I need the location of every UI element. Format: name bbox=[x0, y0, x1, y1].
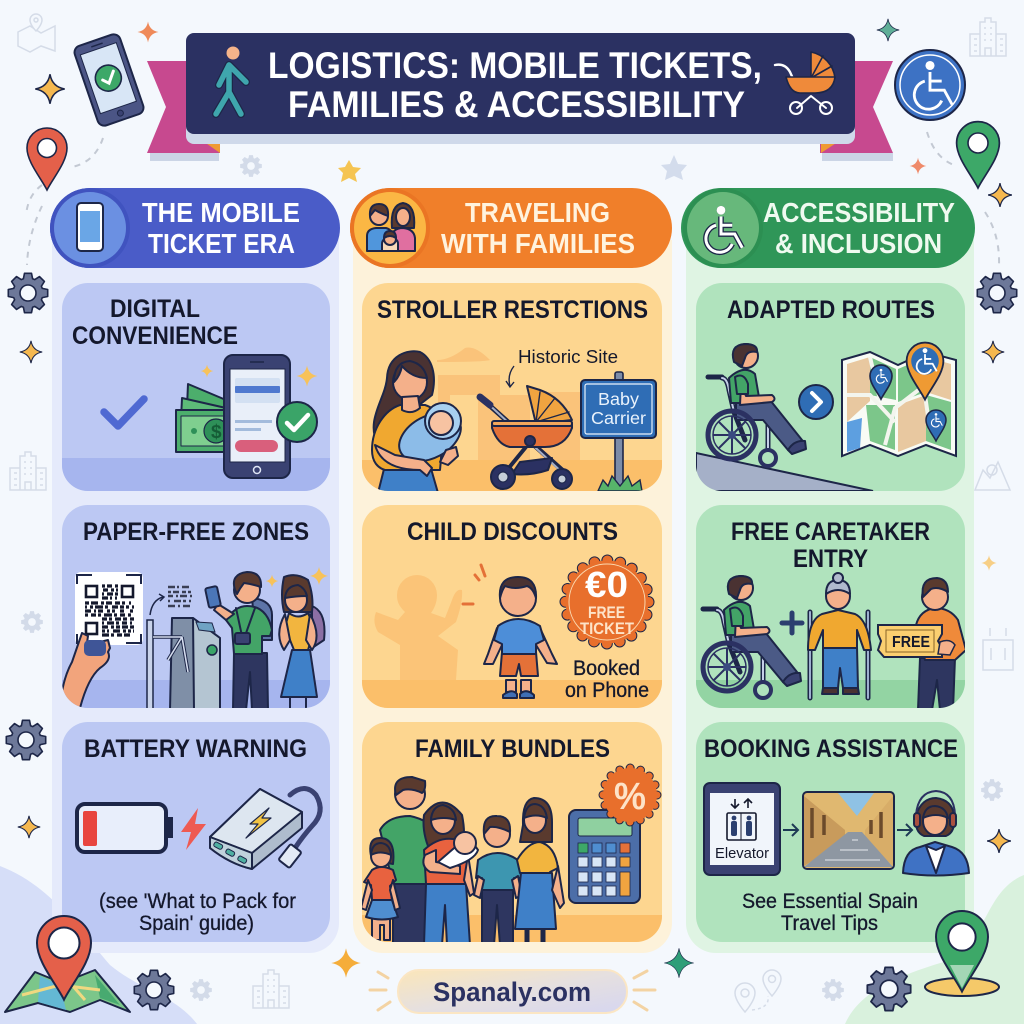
power bank with cable bbox=[210, 788, 320, 869]
folded map bbox=[5, 970, 130, 1012]
note: packing guide bbox=[99, 890, 296, 935]
panel: the mobile ticket era bbox=[50, 188, 340, 953]
discount badge bbox=[603, 768, 657, 822]
icon: sparkle right 2 bbox=[987, 829, 1011, 853]
icon: phone with check bbox=[73, 32, 145, 128]
baby carrier sign: Baby bbox=[598, 389, 639, 409]
heading: battery warning: BATTERY WARNING bbox=[84, 735, 307, 763]
arrow bbox=[897, 824, 912, 836]
baby carrier sign bbox=[581, 372, 656, 491]
note: booked on phone bbox=[565, 657, 649, 702]
icon: faint gear bbox=[240, 155, 262, 177]
icon: faint gear right bbox=[981, 779, 1003, 801]
card: free caretaker entry bbox=[696, 505, 966, 710]
dashed route right bbox=[927, 132, 999, 265]
icon: faint mountain map bbox=[975, 462, 1010, 490]
heading: digital convenience: DIGITAL bbox=[110, 295, 200, 323]
icon: orange sparkle bbox=[138, 22, 158, 42]
card: child discounts bbox=[362, 505, 662, 708]
header pill bbox=[50, 188, 340, 268]
icon: sparkle right 1 bbox=[982, 341, 1004, 363]
title banner bbox=[147, 33, 893, 161]
icon: wheelchair badge bbox=[895, 50, 965, 120]
low battery bbox=[77, 804, 173, 852]
card: paper-free zones bbox=[60, 505, 330, 710]
support agent bbox=[903, 791, 969, 876]
heading: free caretaker entry: FREE CARETAKER bbox=[731, 518, 930, 546]
son bbox=[474, 816, 522, 945]
header pill: TRAVELING bbox=[465, 197, 610, 228]
hand bbox=[60, 633, 110, 708]
wheelchair user bbox=[708, 344, 806, 466]
decorative icons: top right bbox=[877, 18, 1012, 265]
icon: faint gear right bbox=[822, 979, 844, 1001]
boy bbox=[463, 565, 557, 698]
icon: teal sparkle bbox=[877, 19, 899, 41]
sparkles bbox=[201, 365, 318, 386]
discount badge: % bbox=[614, 776, 646, 818]
column background bbox=[52, 240, 339, 953]
mother with baby bbox=[372, 351, 469, 493]
free ticket bbox=[878, 625, 955, 657]
rays around site pill bbox=[370, 971, 655, 1010]
icon: yellow sparkle bbox=[331, 948, 361, 978]
red pin bbox=[37, 916, 91, 1000]
heading: child discounts: CHILD DISCOUNTS bbox=[407, 518, 618, 546]
family group bbox=[361, 777, 564, 945]
left ribbon bbox=[147, 61, 220, 161]
icon: faint building bbox=[970, 18, 1006, 56]
icon: faint city bbox=[253, 970, 289, 1008]
title text: FAMILIES & ACCESSIBILITY bbox=[288, 84, 745, 125]
icon: red pin bbox=[27, 128, 67, 190]
icon: sparkle left 1 bbox=[20, 341, 42, 363]
icon: gear bottom left bbox=[134, 970, 174, 1010]
note: essential spain travel tips: See Essential Spain bbox=[742, 890, 918, 913]
calculator bbox=[569, 810, 640, 903]
panel: accessibility and inclusion bbox=[681, 188, 975, 953]
title text bbox=[268, 45, 762, 125]
plus sign bbox=[782, 613, 802, 633]
free ticket badge: €0 bbox=[585, 564, 628, 605]
icon: gear left 2 bbox=[6, 720, 46, 760]
card: digital convenience bbox=[62, 283, 330, 491]
adult silhouette bbox=[374, 575, 462, 680]
banknotes bbox=[176, 384, 228, 452]
website pill bbox=[398, 970, 627, 1013]
icon: sparkle left 2 bbox=[18, 816, 40, 838]
small QR with arrow bbox=[150, 587, 192, 615]
icon: faint elevator sign bbox=[983, 628, 1013, 670]
turnstile gate bbox=[147, 618, 220, 710]
daughter bbox=[361, 838, 400, 940]
QR code held in hand bbox=[75, 572, 143, 645]
bottom-left map and pin bbox=[5, 916, 130, 1012]
caretaker with ticket bbox=[916, 578, 966, 710]
bottom decorative icons bbox=[134, 948, 911, 1012]
heading: free caretaker entry bbox=[731, 518, 930, 573]
heading: free caretaker entry: ENTRY bbox=[793, 545, 868, 573]
free ticket badge: TICKET bbox=[580, 619, 635, 638]
icon: baby stroller bbox=[775, 52, 835, 114]
check mark bbox=[104, 399, 144, 426]
note: essential spain travel tips: Travel Tips bbox=[781, 912, 878, 935]
card: booking assistance bbox=[696, 722, 969, 942]
stroller bbox=[480, 386, 572, 489]
map pins bbox=[870, 343, 946, 441]
icon: coral sparkle bbox=[910, 158, 926, 174]
note: booked on phone: Booked bbox=[573, 657, 640, 680]
cobbled street scene bbox=[803, 792, 894, 869]
arrow bbox=[783, 824, 798, 836]
note: packing guide: (see 'What to Pack for bbox=[99, 890, 296, 913]
next arrow bbox=[799, 385, 833, 419]
icon: faint city left bbox=[10, 452, 46, 490]
heading: adapted routes: ADAPTED ROUTES bbox=[727, 296, 935, 324]
folded map bbox=[842, 352, 956, 456]
column background bbox=[686, 240, 974, 953]
note: packing guide: Spain' guide) bbox=[139, 912, 254, 935]
traveler woman bbox=[279, 575, 324, 710]
column background bbox=[353, 240, 672, 953]
heading: digital convenience: CONVENIENCE bbox=[72, 322, 238, 350]
heading: family bundles: FAMILY BUNDLES bbox=[415, 735, 610, 763]
icon: yellow star bbox=[338, 160, 361, 182]
dashed route bbox=[26, 138, 103, 265]
phone bbox=[224, 355, 290, 478]
website pill: Spanaly.com bbox=[433, 977, 591, 1007]
icon: faint map bbox=[18, 14, 55, 52]
heading: paper-free zones: PAPER-FREE ZONES bbox=[83, 518, 309, 546]
heading: stroller restrictions: STROLLER RESTCTIONS bbox=[377, 296, 648, 324]
header pill: & INCLUSION bbox=[775, 228, 942, 259]
free ticket badge bbox=[566, 560, 648, 644]
historic site label: Historic Site bbox=[518, 347, 618, 367]
bottom-right green pin bbox=[925, 911, 999, 996]
corner blob: green bbox=[845, 875, 1024, 1024]
father bbox=[379, 776, 427, 942]
title text: LOGISTICS: MOBILE TICKETS, bbox=[268, 45, 762, 86]
icon: sparkle right small bbox=[981, 555, 997, 571]
decorative icons: side rails bbox=[6, 273, 1017, 853]
icon: faint gear left bbox=[21, 611, 43, 633]
card: adapted routes bbox=[696, 283, 965, 491]
mother bbox=[423, 802, 478, 945]
baby carrier sign: Carrier bbox=[591, 408, 646, 428]
heading: booking assistance: BOOKING ASSISTANCE bbox=[704, 735, 958, 763]
right ribbon bbox=[820, 61, 893, 161]
tablet elevator screen bbox=[704, 783, 780, 875]
banknotes: $ bbox=[211, 422, 222, 443]
header pill: WITH FAMILIES bbox=[441, 228, 635, 259]
icon: lavender star bbox=[661, 155, 687, 180]
tablet elevator screen: Elevator bbox=[715, 845, 769, 862]
red bolt bbox=[181, 808, 206, 850]
icon: walking person bbox=[216, 46, 246, 114]
decorative icons: centre bbox=[240, 155, 687, 182]
header pill bbox=[681, 188, 975, 268]
card: stroller restrictions bbox=[362, 283, 662, 493]
sister bbox=[515, 798, 564, 945]
corner blob: lavender bbox=[0, 866, 197, 1024]
note: booked on phone: on Phone bbox=[565, 679, 649, 702]
historic site label bbox=[506, 347, 618, 387]
sparkles bbox=[266, 567, 328, 587]
banner plate bbox=[186, 33, 855, 144]
free ticket: FREE bbox=[892, 634, 930, 651]
card: battery warning bbox=[62, 722, 330, 942]
card: family bundles bbox=[361, 722, 662, 945]
header pill: TICKET ERA bbox=[148, 228, 295, 259]
header pill: ACCESSIBILITY bbox=[763, 197, 955, 228]
icon: gear bottom right bbox=[867, 967, 911, 1011]
header pill bbox=[350, 188, 672, 268]
icon: green pin bbox=[957, 122, 999, 188]
heading: digital convenience bbox=[72, 295, 238, 350]
decorative icons: top left bbox=[18, 14, 158, 265]
icon: gear left 1 bbox=[8, 273, 48, 313]
icon: yellow sparkle right bbox=[988, 183, 1012, 207]
icon: yellow sparkle bbox=[35, 74, 65, 104]
check badge bbox=[277, 402, 317, 442]
icon: green sparkle bbox=[664, 948, 694, 978]
header pill: THE MOBILE bbox=[142, 197, 300, 228]
elderly person in wheelchair bbox=[808, 573, 871, 698]
traveler man bbox=[205, 572, 272, 710]
free ticket badge: FREE bbox=[588, 603, 625, 622]
icon: faint route pins bbox=[735, 970, 781, 1012]
wheelchair user bbox=[703, 576, 801, 698]
panel: traveling with families bbox=[350, 188, 672, 953]
ramp bbox=[696, 453, 873, 491]
note: essential spain travel tips bbox=[742, 890, 918, 935]
icon: faint gear bbox=[190, 979, 212, 1001]
icon: gear right 1 bbox=[977, 273, 1017, 313]
historic site silhouette bbox=[437, 348, 580, 460]
